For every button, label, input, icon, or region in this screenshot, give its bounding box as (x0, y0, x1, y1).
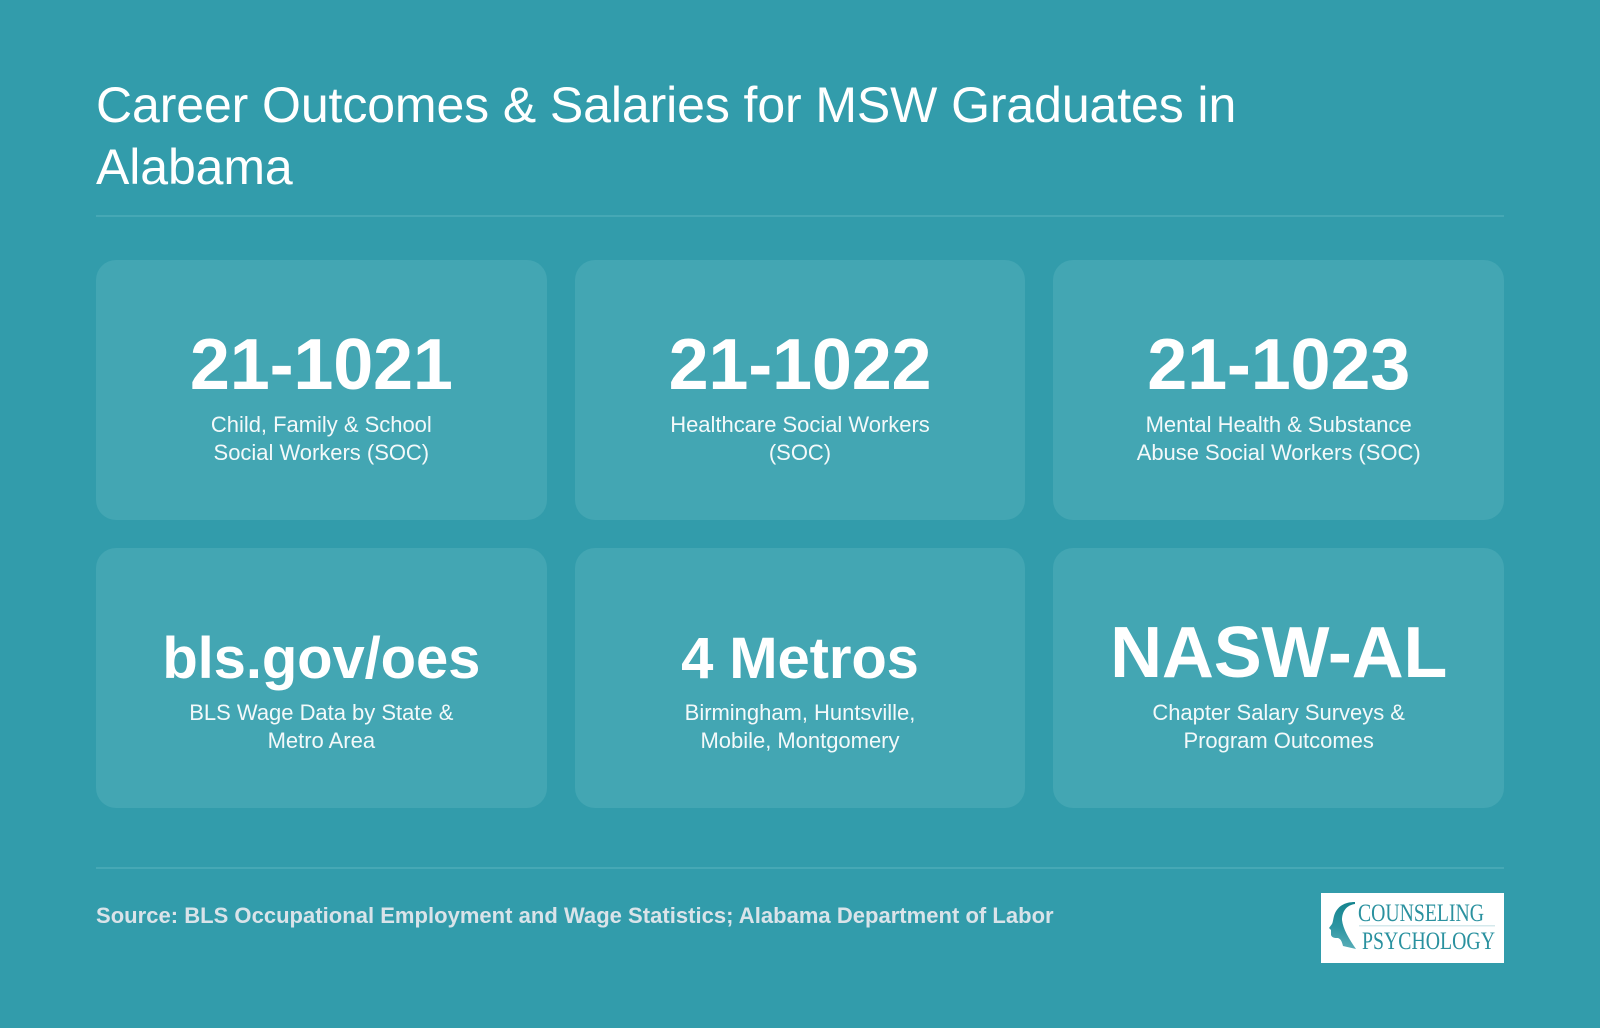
stat: bls.gov/oes: bls.gov/oes (162, 626, 480, 690)
title: Career Outcomes & Salaries for MSW Graduates in Alabama (96, 77, 1236, 195)
label: child, family and school social workers (211, 412, 432, 465)
label: metro names: Mobile, Montgomery (700, 728, 899, 753)
logo: Counseling Psychology (1321, 893, 1504, 963)
logo wordmark (1358, 900, 1495, 955)
label: child, family and school social workers: Child, Family & School (211, 412, 432, 437)
stat: NASW-AL: NASW-AL (1110, 613, 1447, 693)
label: child, family and school social workers: Social Workers (SOC) (214, 440, 429, 465)
stat: 21-1021: 21-1021 (190, 325, 453, 405)
panel: SOC 21-1023 (1053, 260, 1504, 520)
label: metro names: Birmingham, Huntsville, (685, 700, 915, 725)
label: chapter salary surveys: Chapter Salary Surveys & (1152, 700, 1405, 725)
label: metro names (685, 700, 915, 753)
label: mental health and substance abuse social workers (1136, 412, 1421, 465)
label: BLS wage data: BLS Wage Data by State & (189, 700, 453, 725)
label: mental health and substance abuse social workers: Abuse Social Workers (SOC) (1137, 440, 1421, 465)
label: BLS wage data (189, 700, 454, 753)
label: healthcare social workers: Healthcare Social Workers (670, 412, 930, 437)
panel: SOC 21-1022 (575, 260, 1025, 520)
panel: metros (575, 548, 1025, 808)
panel: SOC 21-1021 (96, 260, 547, 520)
stat: 4 Metros: 4 Metros (681, 626, 919, 690)
panel: NASW-AL (1053, 548, 1504, 808)
stat: 21-1023: 21-1023 (1147, 325, 1410, 405)
label: BLS wage data: Metro Area (268, 728, 375, 753)
stat: 21-1022: 21-1022 (669, 325, 931, 405)
label: healthcare social workers: (SOC) (769, 440, 831, 465)
panel: BLS wage data (96, 548, 547, 808)
source note: Source: BLS Occupational Employment and Wage Statistics; Alabama Department of Labor (96, 903, 1054, 928)
label: mental health and substance abuse social workers: Mental Health & Substance (1146, 412, 1412, 437)
label: healthcare social workers (670, 412, 930, 465)
label: chapter salary surveys (1152, 700, 1405, 753)
label: chapter salary surveys: Program Outcomes (1183, 728, 1374, 753)
icon: head silhouette (1329, 902, 1356, 949)
